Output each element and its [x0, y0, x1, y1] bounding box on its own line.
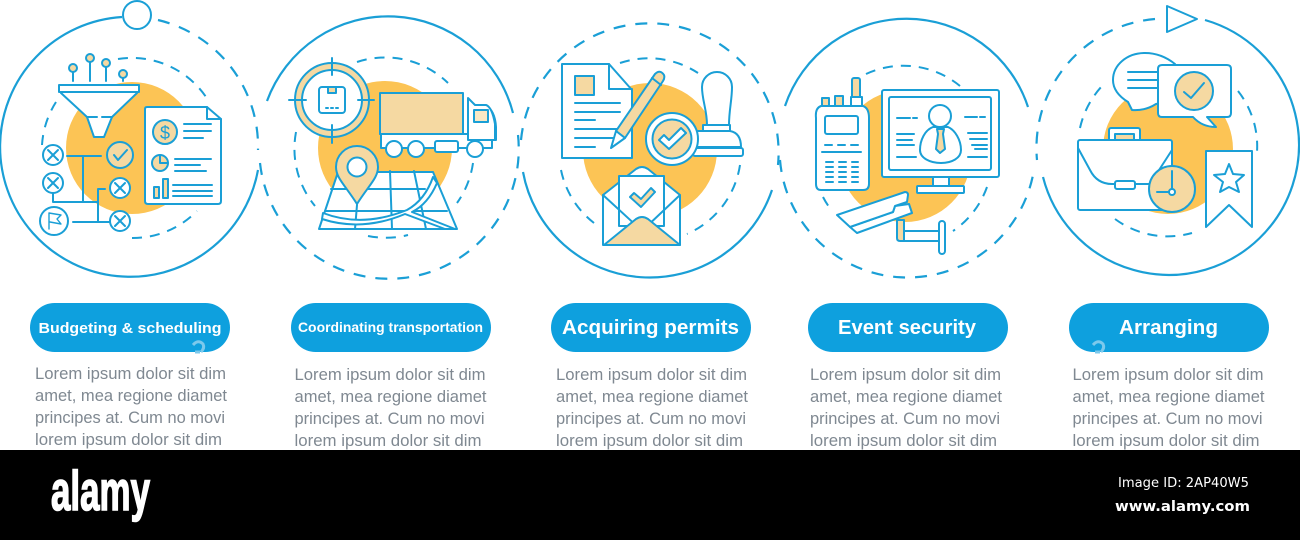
body text 5: lorem ipsum dolor sit dim — [1072, 432, 1260, 450]
heading: Arranging: Arranging — [1119, 317, 1218, 339]
icon: speech bubbles — [1113, 53, 1231, 127]
icon: cctv camera — [837, 192, 945, 254]
icon: map — [319, 171, 457, 229]
body text 3: Lorem ipsum dolor sit dim — [556, 366, 747, 384]
panel: arranging — [1036, 6, 1299, 450]
yellow backdrop 3 — [583, 83, 717, 217]
icon: clock — [1149, 166, 1195, 212]
body text 4: Lorem ipsum dolor sit dim — [810, 366, 1001, 384]
icon: budget document — [145, 107, 221, 204]
heading: Event security: Event security — [838, 317, 977, 339]
heading: Coordinating transportation: Coordinating transportation — [298, 320, 483, 335]
icon: budget document: $ — [160, 123, 170, 143]
icon: walkie talkie — [816, 78, 869, 190]
body text 4: principes at. Cum no movi — [810, 410, 1000, 428]
panel: acquiring permits — [521, 23, 779, 450]
heading: Event security — [808, 303, 1008, 352]
body text 3: amet, mea regione diamet — [556, 388, 748, 406]
step ring 4 — [780, 19, 1033, 277]
body text 1: amet, mea regione diamet — [35, 387, 227, 405]
icon: funnel with options — [40, 54, 139, 235]
panel: event security — [780, 19, 1033, 450]
body text 3: lorem ipsum dolor sit dim — [556, 432, 743, 450]
step ring 5 — [1036, 6, 1299, 275]
yellow backdrop 4 — [839, 90, 971, 222]
body text 5: amet, mea regione diamet — [1072, 388, 1265, 406]
heading: Budgeting and scheduling — [30, 303, 230, 352]
step ring 2 — [260, 16, 519, 279]
icon: briefcase — [1078, 128, 1172, 210]
website: www.alamy.com — [1115, 499, 1250, 515]
icon: package target — [289, 58, 374, 143]
icon: location pin — [336, 146, 378, 204]
body text 2: principes at. Cum no movi — [294, 410, 484, 428]
icon: stamp — [693, 72, 743, 156]
icon: bookmark with star — [1206, 151, 1252, 227]
body text 1: lorem ipsum dolor sit dim — [35, 431, 222, 449]
panel: coordinating transportation — [260, 16, 519, 450]
heading: Budgeting and scheduling: Budgeting & scheduling — [38, 320, 222, 337]
alamy logo: alamy — [51, 459, 150, 522]
body text 4: amet, mea regione diamet — [810, 388, 1002, 406]
icon: approval badge — [646, 113, 698, 165]
step ring 3 — [521, 23, 779, 278]
heading: Acquiring permits: Acquiring permits — [562, 317, 739, 339]
icon: envelope — [603, 167, 680, 245]
body text 1: Lorem ipsum dolor sit dim — [35, 365, 226, 383]
body text 4: lorem ipsum dolor sit dim — [810, 432, 997, 450]
panel: budgeting and scheduling — [0, 1, 258, 449]
heading: Arranging — [1069, 303, 1269, 352]
step ring 1 — [0, 1, 258, 277]
body text 1: principes at. Cum no movi — [35, 409, 225, 427]
icon: contract document — [562, 64, 632, 158]
footer bar — [0, 450, 1300, 540]
body text 2: lorem ipsum dolor sit dim — [294, 432, 482, 450]
icon: truck — [380, 93, 496, 157]
body text 3: principes at. Cum no movi — [556, 410, 746, 428]
body text 2: amet, mea regione diamet — [294, 388, 487, 406]
body text 5: principes at. Cum no movi — [1072, 410, 1262, 428]
yellow backdrop 5 — [1103, 84, 1233, 214]
heading: Coordinating transportation — [291, 303, 491, 352]
yellow backdrop 2 — [318, 81, 452, 215]
image id: Image ID: 2AP40W5 — [1118, 475, 1249, 491]
yellow backdrop 1 — [66, 82, 198, 214]
body text 5: Lorem ipsum dolor sit dim — [1072, 366, 1264, 384]
icon: pencil — [611, 72, 664, 148]
heading: Acquiring permits — [551, 303, 751, 352]
icon: security monitor — [882, 90, 999, 193]
body text 2: Lorem ipsum dolor sit dim — [294, 366, 486, 384]
